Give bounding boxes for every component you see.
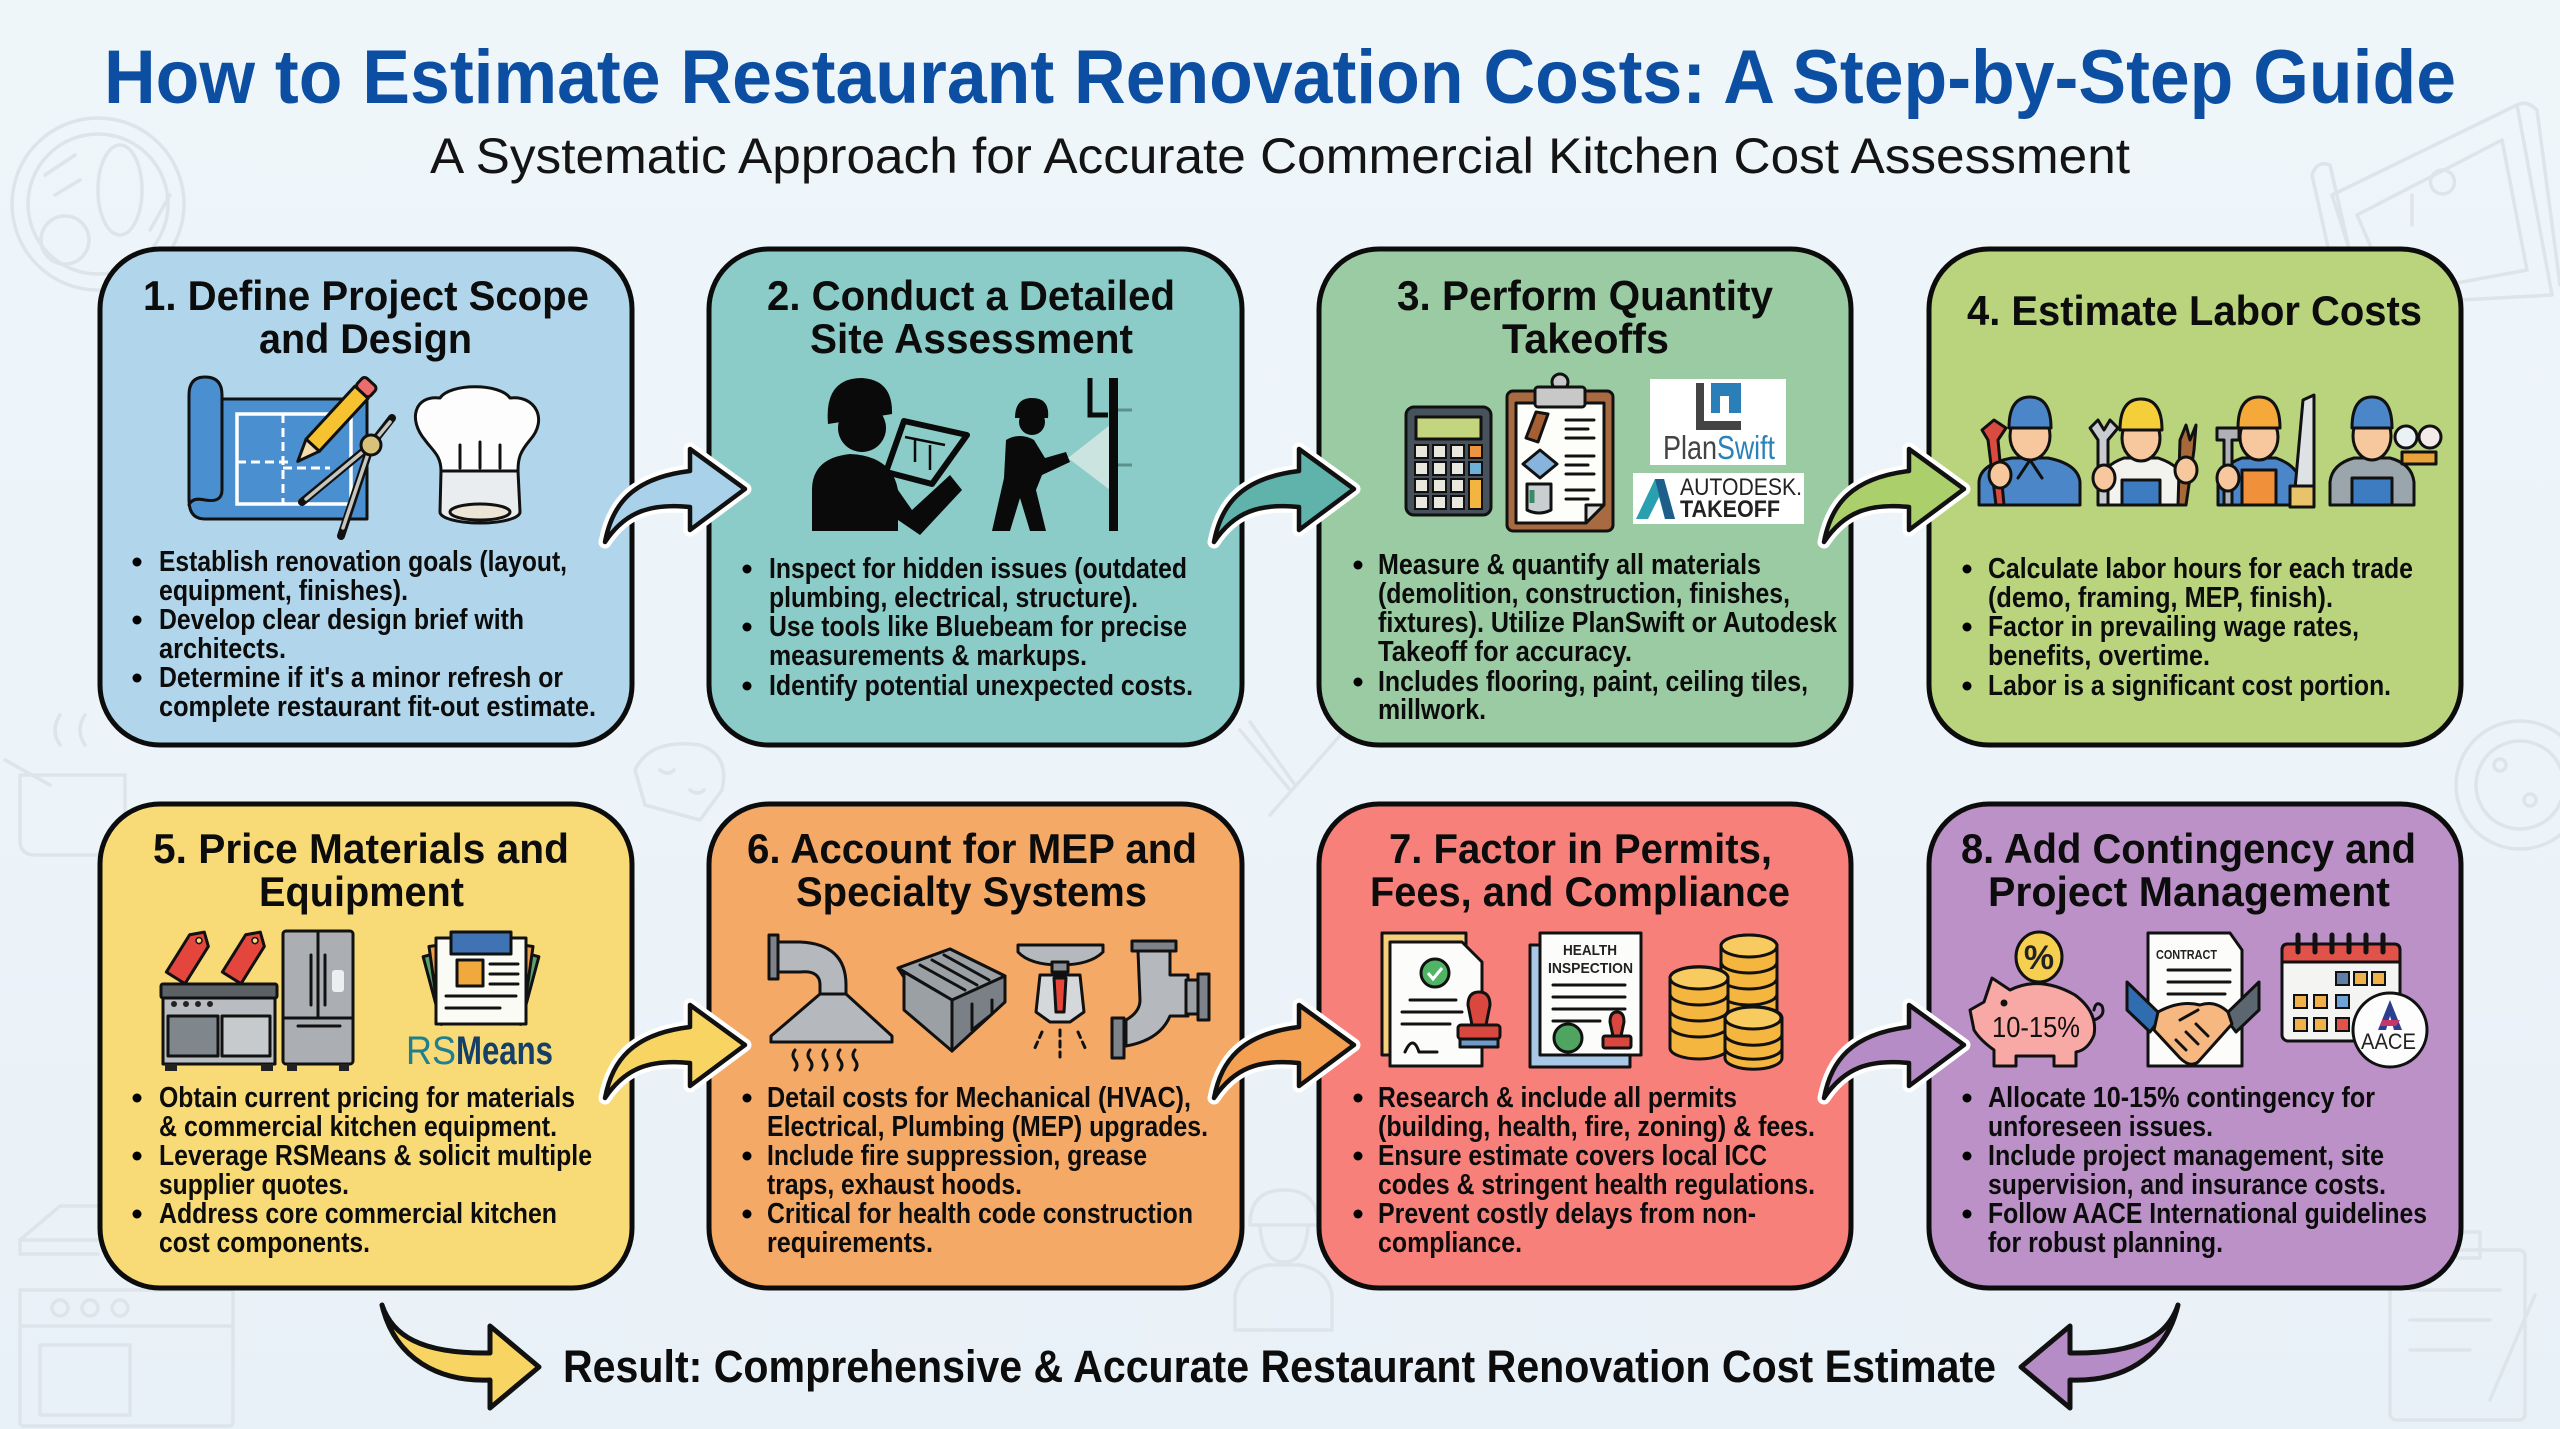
heading: step 1: 1. Define Project Scope — [143, 272, 589, 319]
watermark: pot — [5, 715, 125, 855]
watermark: worker — [1235, 1190, 1332, 1330]
bullet list: step 6 — [742, 1082, 1208, 1259]
icon: price tags — [166, 926, 270, 984]
icon: health inspection report — [1530, 933, 1641, 1067]
logo: AACE — [2353, 993, 2427, 1067]
bullet list: step 7: compliance. — [1378, 1227, 1522, 1259]
icon: electrician — [2090, 399, 2197, 505]
watermark: clipboard — [2390, 1232, 2535, 1420]
heading: step 3: Takeoffs — [1502, 315, 1669, 362]
logo: PlanSwift: Plan — [1663, 429, 1717, 466]
logo: PlanSwift — [1650, 379, 1786, 466]
bullet list: step 5: Leverage RSMeans & solicit multiple — [159, 1140, 592, 1172]
watermark: plate — [12, 118, 184, 290]
bullet list: step 8: supervision, and insurance costs. — [1988, 1169, 2386, 1201]
bullet list: step 8: Include project management, site — [1988, 1140, 2384, 1172]
bullet list: step 7: Prevent costly delays from non- — [1378, 1198, 1756, 1230]
arrow: step 6 to 7 — [1214, 1005, 1354, 1098]
icon: calendar — [2282, 935, 2400, 1041]
icon: exhaust hood — [769, 935, 892, 1070]
heading: step 8: Project Management — [1988, 868, 2390, 915]
icon: worker with flashlight and pipes — [992, 378, 1132, 531]
heading: step 2 — [767, 272, 1175, 362]
bullet list: step 2: Identify potential unexpected costs. — [769, 670, 1193, 702]
icon: signed permit with stamp — [1382, 933, 1500, 1066]
bullet list: step 3: fixtures). Utilize PlanSwift or Autodesk — [1378, 607, 1838, 639]
watermark: stove — [20, 1290, 233, 1426]
panel: step 2 — [709, 249, 1242, 745]
panel: step 7 — [1319, 804, 1851, 1288]
heading: step 8 — [1961, 825, 2416, 915]
logo: RSMeans — [406, 1029, 553, 1073]
icon: health inspection report: INSPECTION — [1548, 960, 1633, 977]
icon: clipboard checklist — [1507, 374, 1613, 531]
logo: Autodesk Takeoff: AUTODESK. — [1680, 474, 1802, 501]
bullet list: step 2: plumbing, electrical, structure). — [769, 582, 1138, 614]
bullet list: step 4: benefits, overtime. — [1988, 640, 2210, 672]
bullet list: step 1: Determine if it's a minor refresh or — [159, 662, 563, 694]
arrow: step 2 to 3 — [1214, 449, 1354, 542]
watermark: blueprint — [2312, 103, 2560, 314]
heading: step 7 — [1370, 825, 1790, 915]
bullet list: step 7: Research & include all permits — [1378, 1082, 1737, 1114]
bullet list: step 8: for robust planning. — [1988, 1227, 2223, 1259]
heading: step 7: Fees, and Compliance — [1370, 868, 1790, 915]
icon: piggy bank with percent coin: 10-15% — [1992, 1012, 2080, 1044]
watermark: hood — [20, 1206, 98, 1254]
bullet list: step 5: cost components. — [159, 1227, 370, 1259]
panel: step 3 — [1319, 249, 1851, 745]
bullet list: step 1: architects. — [159, 633, 286, 665]
bullet list: step 7: codes & stringent health regulations. — [1378, 1169, 1815, 1201]
heading: step 7: 7. Factor in Permits, — [1389, 825, 1772, 872]
panel: step 8 — [1929, 804, 2461, 1288]
bullet list: step 3: Includes flooring, paint, ceiling tiles, — [1378, 666, 1808, 698]
arrow: step 5 to 6 — [605, 1005, 745, 1098]
bullet list: step 6: Include fire suppression, grease — [767, 1140, 1147, 1172]
watermark: plate right — [2456, 721, 2560, 849]
bullet list: step 6: Critical for health code construction — [767, 1198, 1193, 1230]
heading: step 4: 4. Estimate Labor Costs — [1967, 287, 2422, 334]
heading: step 6: 6. Account for MEP and — [747, 825, 1197, 872]
bullet list: step 2: Inspect for hidden issues (outdated — [769, 553, 1187, 585]
logo: AACE: AACE — [2361, 1029, 2416, 1054]
bullet list: step 6: Electrical, Plumbing (MEP) upgrades. — [767, 1111, 1208, 1143]
heading: step 1: and Design — [259, 315, 472, 362]
panel: step 5 — [100, 804, 632, 1288]
bullet list: step 4: Factor in prevailing wage rates, — [1988, 611, 2359, 643]
result statement: Result: Comprehensive & Accurate Restaurant Renovation Cost Estimate — [563, 1341, 1996, 1392]
bullet list: step 4: Calculate labor hours for each trade — [1988, 553, 2413, 585]
bullet list: step 5: supplier quotes. — [159, 1169, 349, 1201]
heading: step 1 — [143, 272, 589, 362]
bullet list: step 1: Establish renovation goals (layout, — [159, 546, 567, 578]
bullet list: step 2: Use tools like Bluebeam for precise — [769, 611, 1187, 643]
icon: commercial range — [161, 984, 277, 1071]
bullet list: step 1: Develop clear design brief with — [159, 604, 524, 636]
bullet list: step 5: Address core commercial kitchen — [159, 1198, 557, 1230]
icon: health inspection report: HEALTH — [1563, 942, 1617, 959]
heading: step 8: 8. Add Contingency and — [1961, 825, 2416, 872]
icon: plumbing pipe elbow — [1112, 941, 1209, 1058]
bullet list: step 5 — [132, 1082, 592, 1259]
subtitle: A Systematic Approach for Accurate Commercial Kitchen Cost Assessment — [430, 128, 2130, 184]
icon: plumber — [1979, 397, 2080, 505]
icon: HVAC technician — [2330, 397, 2441, 505]
icon: blueprint with pencil and compass — [189, 376, 392, 536]
heading: step 5 — [153, 825, 569, 915]
bullet list: step 1 — [132, 546, 596, 723]
bullet list: step 8: unforeseen issues. — [1988, 1111, 2213, 1143]
bullet list: step 8 — [1962, 1082, 2427, 1259]
heading: step 3 — [1397, 272, 1774, 362]
icon: contract with handshake — [2127, 933, 2259, 1066]
bullet list: step 8: Allocate 10-15% contingency for — [1988, 1082, 2375, 1114]
arrow: step 7 to 8 — [1824, 1005, 1964, 1098]
logo: RSMeans: Means — [456, 1029, 553, 1073]
bullet list: step 8: Follow AACE International guidelines — [1988, 1198, 2427, 1230]
arrow: step 8 to result — [2021, 1305, 2178, 1408]
icon: grease trap — [898, 949, 1005, 1051]
icon: inspector with tablet — [812, 378, 967, 535]
bullet list: step 2: measurements & markups. — [769, 640, 1087, 672]
bullet list: step 2 — [742, 553, 1193, 702]
bullet list: step 3: (demolition, construction, finishes, — [1378, 578, 1790, 610]
icon: coin stacks — [1670, 935, 1782, 1069]
arrow: step 3 to 4 — [1824, 449, 1964, 542]
icon: chef hat — [415, 387, 539, 523]
bullet list: step 6: Detail costs for Mechanical (HVAC), — [767, 1082, 1191, 1114]
bullet list: step 4: (demo, framing, MEP, finish). — [1988, 582, 2333, 614]
heading: step 6 — [747, 825, 1197, 915]
logo: Autodesk Takeoff — [1633, 473, 1804, 524]
icon: RSMeans cost books — [423, 932, 539, 1024]
bullet list: step 1: equipment, finishes). — [159, 575, 408, 607]
bullet list: step 4 — [1962, 553, 2413, 702]
logo: Autodesk Takeoff: TAKEOFF — [1680, 496, 1780, 523]
icon: carpenter — [2217, 395, 2314, 507]
bullet list: step 3: Takeoff for accuracy. — [1378, 636, 1632, 668]
icon: contract with handshake: CONTRACT — [2156, 947, 2217, 962]
logo: PlanSwift: Swift — [1717, 429, 1775, 466]
icon: calculator — [1406, 407, 1491, 515]
bullet list: step 7 — [1354, 1082, 1815, 1259]
logo: RSMeans: RS — [406, 1029, 456, 1073]
watermark: fork and knife — [1240, 722, 1345, 815]
bullet list: step 6: traps, exhaust hoods. — [767, 1169, 1022, 1201]
icon: piggy bank with percent coin: % — [2024, 939, 2054, 977]
heading: step 5: 5. Price Materials and — [153, 825, 569, 872]
icon: refrigerator — [283, 931, 353, 1071]
arrow: step 1 to 2 — [605, 449, 745, 542]
heading: step 2: 2. Conduct a Detailed — [767, 272, 1175, 319]
heading: step 2: Site Assessment — [810, 315, 1133, 362]
bullet list: step 3 — [1354, 549, 1838, 726]
panel: step 1 — [100, 249, 632, 745]
heading: step 5: Equipment — [259, 868, 464, 915]
panel: step 4 — [1929, 249, 2461, 745]
watermark: bread — [635, 744, 724, 820]
heading: step 3: 3. Perform Quantity — [1397, 272, 1774, 319]
bullet list: step 1: complete restaurant fit-out estimate. — [159, 691, 596, 723]
arrow: step 5 to result — [382, 1305, 539, 1408]
bullet list: step 4: Labor is a significant cost portion. — [1988, 670, 2391, 702]
bullet list: step 3: millwork. — [1378, 694, 1486, 726]
bullet list: step 7: Ensure estimate covers local ICC — [1378, 1140, 1767, 1172]
icon: piggy bank with percent coin — [1970, 932, 2103, 1066]
bullet list: step 3: Measure & quantify all materials — [1378, 549, 1761, 581]
bullet list: step 5: Obtain current pricing for materials — [159, 1082, 575, 1114]
icon: fire sprinkler — [1018, 945, 1103, 1057]
bullet list: step 5: & commercial kitchen equipment. — [159, 1111, 557, 1143]
panel: step 6 — [709, 804, 1242, 1288]
title: How to Estimate Restaurant Renovation Costs: A Step-by-Step Guide — [104, 35, 2456, 120]
bullet list: step 6: requirements. — [767, 1227, 933, 1259]
heading: step 6: Specialty Systems — [796, 868, 1147, 915]
bullet list: step 7: (building, health, fire, zoning) & fees. — [1378, 1111, 1815, 1143]
